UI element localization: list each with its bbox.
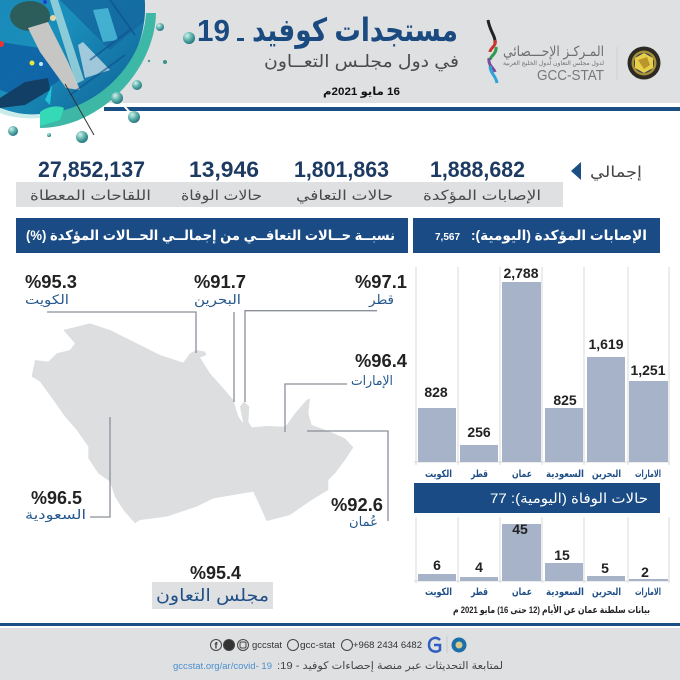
values: 825	[553, 392, 577, 408]
stat: recovered: 1,801,863	[294, 157, 389, 182]
label: Oman: %92.6	[331, 495, 383, 515]
icon: ribbon	[488, 20, 497, 83]
map panel	[25, 272, 407, 609]
label: Qatar: قطر	[368, 292, 394, 308]
bars	[418, 524, 668, 581]
bar chart: daily deaths	[414, 517, 670, 598]
label: GCC total	[152, 563, 273, 609]
heading: daily confirmed: الإصابات المؤكدة (اليومية):	[471, 227, 647, 244]
stat: vaccines: اللقاحات المعطاة	[30, 187, 151, 203]
label: Oman: عُمان	[349, 514, 378, 529]
url: gccstat.org/ar/covid- 19	[173, 661, 272, 672]
country labels: البحرين	[592, 469, 621, 480]
values: 4	[475, 559, 483, 575]
country labels: الكويت	[425, 469, 452, 480]
logo: GCC-STAT: المـركـز الإحـــصائي	[503, 43, 604, 60]
label: UAE: %96.4	[355, 351, 407, 371]
stat: recovered	[294, 157, 393, 204]
label: GCC total: %95.4	[190, 563, 241, 583]
label: Kuwait: %95.3	[25, 272, 77, 292]
country labels: البحرين	[592, 587, 621, 598]
footer	[0, 623, 680, 680]
country labels	[425, 469, 661, 480]
stat: recovered: حالات التعافي	[296, 187, 393, 204]
bars	[418, 282, 668, 462]
label: Qatar: %97.1	[355, 272, 407, 292]
icon: GCC emblem	[628, 46, 660, 80]
heading: daily confirmed: 7,567	[435, 232, 460, 243]
note: Oman data: بيانات سلطنة عمان عن الأيام (12 حتى 16) مايو 2021 م	[453, 604, 650, 616]
footer: f	[214, 640, 218, 650]
handle: linkedin: gcc-stat	[300, 640, 335, 651]
logo: GCC-STAT: GCC-STAT	[537, 67, 604, 84]
label: UAE: الإمارات	[351, 373, 393, 389]
stat: deaths: حالات الوفاة	[181, 187, 262, 204]
heading: daily confirmed	[413, 218, 660, 253]
icon: triangle	[571, 162, 581, 180]
social icons	[210, 640, 352, 650]
values: 2,788	[503, 265, 539, 281]
label: UAE	[351, 351, 407, 389]
subtitle: في دول مجلـس التعــاون	[264, 52, 459, 72]
stat: deaths: 13,946	[189, 157, 259, 182]
values	[433, 521, 649, 580]
title: مستجدات كوفيد	[252, 12, 458, 49]
heading: recovery share: نسبــة حــالات التعافــي من إجمالــي الحــالات المؤكدة (%)	[26, 227, 395, 244]
country labels: قطر	[470, 587, 488, 598]
country labels: الامارات	[635, 587, 661, 598]
heading: recovery share	[16, 218, 408, 253]
link text: لمتابعة التحديثات عبر منصة إحصاءات كوفيد - 19:	[277, 660, 503, 672]
stat: confirmed: الإصابات المؤكدة	[423, 187, 541, 204]
values: 828	[424, 384, 448, 400]
country labels: عمان	[512, 469, 532, 480]
title	[197, 12, 458, 49]
callout lines	[47, 311, 388, 521]
country labels: السعودية	[546, 587, 584, 598]
country labels: عمان	[512, 587, 532, 598]
values: 1,251	[630, 362, 666, 378]
icon: round logo	[452, 638, 466, 652]
values: 256	[467, 424, 491, 440]
header illustration: vaccine and molecules	[0, 0, 195, 143]
label: Saudi Arabia	[25, 488, 86, 523]
logo: GCC-STAT	[488, 20, 617, 84]
phone: +968 2434 6482	[353, 640, 422, 651]
values: 15	[554, 547, 570, 563]
country labels: الكويت	[425, 587, 452, 598]
stat: confirmed: 1,888,682	[430, 157, 525, 182]
label: Saudi Arabia: السعودية	[25, 507, 86, 523]
values: 45	[512, 521, 528, 537]
label: Kuwait	[25, 272, 77, 308]
values	[424, 265, 666, 440]
label: Qatar	[355, 272, 407, 308]
country labels: الامارات	[635, 469, 661, 480]
values: 5	[601, 560, 609, 576]
bar chart: daily confirmed	[414, 265, 670, 480]
header band	[0, 0, 680, 111]
stat: vaccines: 27,852,137	[38, 157, 145, 182]
label: Kuwait: الكويت	[25, 292, 69, 308]
heading: daily deaths: حالات الوفاة (اليومية): 77	[490, 490, 648, 507]
label: Saudi Arabia: %96.5	[31, 488, 82, 508]
handle: social: gccstat	[252, 640, 282, 651]
totals label	[571, 162, 642, 182]
values: 6	[433, 557, 441, 573]
country labels: السعودية	[546, 469, 584, 480]
logo: GCC-STAT: لدول مجلس التعاون لدول الخليج العربية	[503, 60, 604, 67]
stat: confirmed	[423, 157, 541, 204]
label: Bahrain: البحرين	[194, 292, 241, 308]
label: Oman	[331, 495, 383, 529]
label: GCC total: مجلس التعاون	[156, 586, 269, 605]
country labels	[425, 587, 661, 598]
panel: totals	[16, 157, 563, 207]
stat: deaths	[181, 157, 262, 204]
label: Bahrain: %91.7	[194, 272, 246, 292]
label: Bahrain	[194, 272, 246, 308]
map: GCC countries	[32, 323, 353, 523]
country labels: قطر	[470, 469, 488, 480]
totals label: إجمالي	[590, 164, 642, 182]
heading: daily deaths	[414, 483, 660, 513]
title: 19	[197, 13, 230, 48]
date: 16 مايو 2021م	[323, 86, 400, 98]
stat: vaccines	[30, 157, 151, 203]
values: 2	[641, 564, 649, 580]
values: 1,619	[588, 336, 624, 352]
icon: G logo	[429, 638, 440, 652]
